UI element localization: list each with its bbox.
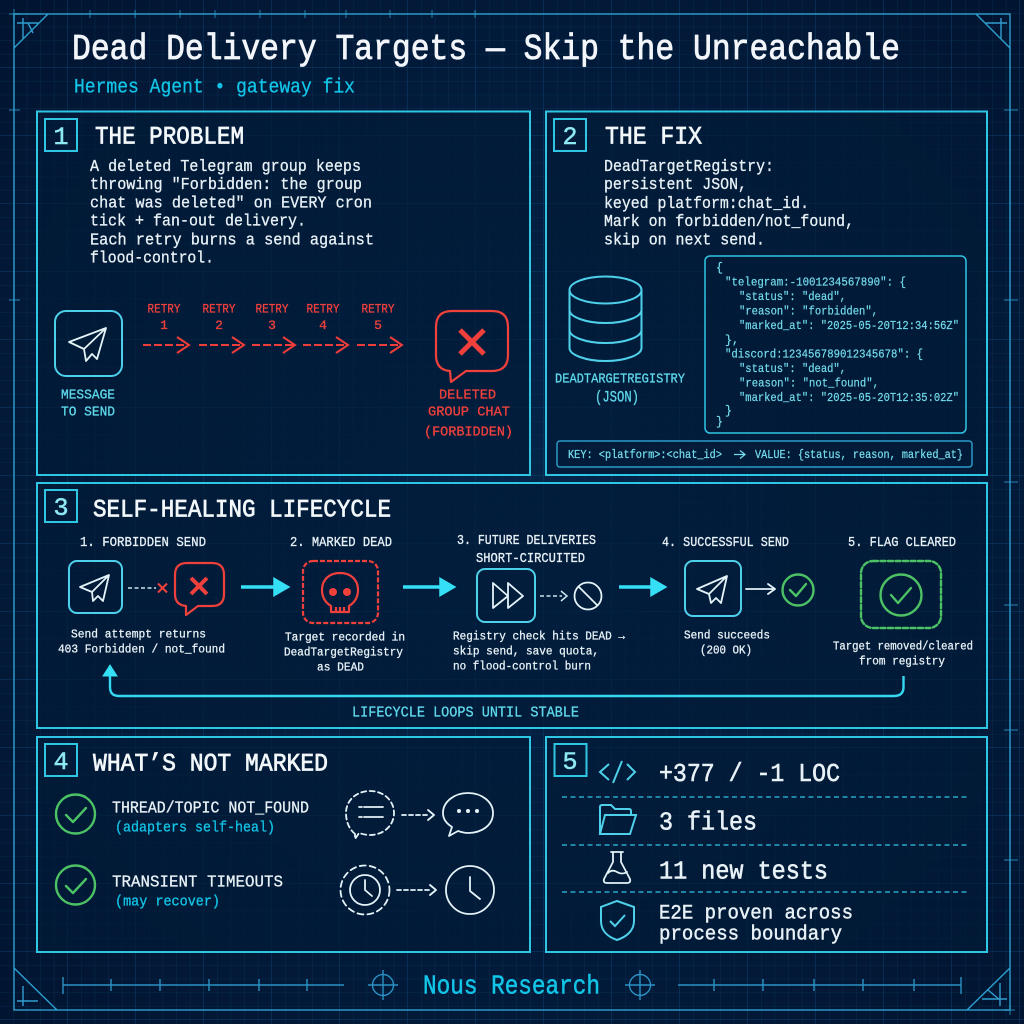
label: message to send: TO SEND bbox=[61, 404, 115, 420]
fix description bbox=[604, 157, 854, 250]
JSON code box: } bbox=[716, 416, 723, 429]
label: database: DEADTARGETREGISTRY bbox=[555, 372, 686, 388]
JSON code box: "status": "dead", bbox=[739, 363, 846, 376]
item: thread/topic not found bbox=[56, 794, 309, 836]
fix description: DeadTargetRegistry: bbox=[604, 157, 774, 176]
step 1: forbidden send: 1. FORBIDDEN SEND bbox=[80, 535, 206, 551]
step 5: flag cleared bbox=[833, 535, 973, 668]
JSON code box: "marked_at": "2025-05-20T12:34:56Z" bbox=[739, 320, 959, 333]
number badge 4: 4 bbox=[53, 748, 69, 777]
step 1: forbidden send bbox=[58, 535, 225, 656]
problem description: Each retry burns a send against bbox=[90, 230, 374, 250]
JSON code box bbox=[705, 256, 966, 433]
number badge 2 bbox=[554, 119, 586, 152]
panel 4: what's not marked bbox=[37, 737, 530, 952]
stat: tests: 11 new tests bbox=[659, 858, 828, 886]
label: deleted group chat: GROUP CHAT bbox=[428, 404, 510, 420]
panel 2: the fix bbox=[546, 112, 987, 475]
label: deleted group chat bbox=[424, 388, 513, 440]
JSON code box: "telegram:-1001234567890": { bbox=[725, 276, 906, 290]
retry arrows bbox=[143, 337, 402, 353]
retry labels: RETRY bbox=[306, 302, 340, 316]
label: deleted group chat: DELETED bbox=[439, 388, 496, 404]
number badge 1: 1 bbox=[53, 123, 69, 152]
step 1: forbidden send: Send attempt returns bbox=[71, 628, 206, 642]
problem description bbox=[90, 157, 374, 268]
retry labels: RETRY bbox=[202, 302, 236, 316]
retry labels: 2 bbox=[215, 318, 223, 333]
arrow: step 1 to 2 bbox=[241, 580, 287, 594]
JSON code box: "discord:123456789012345678": { bbox=[725, 348, 923, 362]
JSON code box: "reason": "forbidden", bbox=[739, 306, 878, 318]
item: transient timeouts bbox=[56, 866, 283, 910]
label: message to send: MESSAGE bbox=[61, 388, 115, 404]
JSON code box: "reason": "not_found", bbox=[739, 378, 879, 390]
step 5: flag cleared: 5. FLAG CLEARED bbox=[848, 535, 956, 551]
subtitle: Hermes Agent • gateway fix bbox=[74, 76, 355, 100]
title: Dead Delivery Targets — Skip the Unreachable bbox=[72, 29, 900, 70]
fix description: Mark on forbidden/not_found, bbox=[604, 212, 854, 231]
label: database: (JSON) bbox=[595, 388, 639, 406]
item: transient timeouts: TRANSIENT TIMEOUTS bbox=[112, 872, 283, 892]
step 4: successful send: (200 OK) bbox=[700, 644, 752, 658]
stat: tests bbox=[604, 852, 828, 886]
fix description: persistent JSON, bbox=[604, 175, 747, 194]
label: database bbox=[555, 372, 686, 406]
heading: lifecycle: SELF-HEALING LIFECYCLE bbox=[93, 496, 391, 524]
panel 3: self-healing lifecycle bbox=[37, 483, 987, 728]
panel 5: stats bbox=[546, 737, 987, 952]
step 2: marked dead bbox=[284, 535, 405, 674]
stat: files bbox=[600, 805, 757, 838]
icon: database bbox=[570, 276, 642, 361]
arrow: step 2 to 3 bbox=[403, 580, 453, 594]
heading: the fix: THE FIX bbox=[605, 122, 702, 152]
retry labels: 4 bbox=[319, 318, 327, 333]
stat: e2e: E2E proven across bbox=[659, 902, 853, 926]
step 5: flag cleared: from registry bbox=[859, 654, 945, 668]
step 2: marked dead: Target recorded in bbox=[285, 630, 405, 644]
step 1: forbidden send: 403 Forbidden / not_found bbox=[58, 642, 225, 656]
key value legend: KEY: <platform>:<chat_id> bbox=[568, 449, 722, 462]
key value legend: VALUE: {status, reason, marked_at} bbox=[755, 449, 963, 462]
step 4: successful send: Send succeeds bbox=[684, 628, 770, 642]
loop arrow bbox=[103, 665, 904, 696]
retry labels: RETRY bbox=[256, 302, 289, 316]
problem description: A deleted Telegram group keeps bbox=[90, 157, 361, 176]
arrow: step 3 to 4 bbox=[619, 580, 664, 594]
fix description: skip on next send. bbox=[604, 230, 765, 250]
problem description: throwing "Forbidden: the group bbox=[90, 175, 362, 194]
icon: deleted group chat bbox=[436, 311, 508, 382]
problem description: flood-control. bbox=[90, 248, 214, 268]
stat: files: 3 files bbox=[659, 808, 757, 838]
stat: lines of code: +377 / -1 LOC bbox=[659, 760, 840, 789]
JSON code box: { bbox=[716, 262, 723, 275]
number badge 1 bbox=[45, 119, 77, 152]
JSON code box: } bbox=[725, 405, 732, 418]
number badge 5: 5 bbox=[562, 748, 578, 777]
retry labels bbox=[148, 302, 395, 333]
stat: e2e: process boundary bbox=[659, 924, 842, 946]
item: transient timeouts: (may recover) bbox=[115, 894, 220, 910]
step 2: marked dead: DeadTargetRegistry bbox=[284, 646, 403, 660]
step 3: future deliveries short-circuited: no flood-control burn bbox=[453, 660, 591, 674]
problem description: tick + fan-out delivery. bbox=[90, 212, 306, 230]
label: deleted group chat: (FORBIDDEN) bbox=[424, 424, 513, 440]
step 5: flag cleared: Target removed/cleared bbox=[833, 640, 973, 654]
icon: dashed clock to clock bbox=[340, 866, 494, 914]
heading: not marked: WHAT’S NOT MARKED bbox=[93, 750, 328, 778]
number badge 3: 3 bbox=[53, 494, 69, 523]
retry labels: 1 bbox=[160, 318, 168, 333]
step 2: marked dead: 2. MARKED DEAD bbox=[290, 535, 392, 551]
JSON code box: "status": "dead", bbox=[739, 291, 846, 304]
step 2: marked dead: as DEAD bbox=[317, 660, 364, 674]
label: message to send bbox=[61, 388, 115, 420]
step 3: future deliveries short-circuited: Registry check hits DEAD → bbox=[453, 630, 626, 644]
step 4: successful send: 4. SUCCESSFUL SEND bbox=[662, 535, 789, 551]
step 4: successful send bbox=[662, 535, 814, 658]
loop caption: LIFECYCLE LOOPS UNTIL STABLE bbox=[352, 706, 579, 722]
item: thread/topic not found: THREAD/TOPIC NOT_FOUND bbox=[112, 798, 309, 818]
footer: rulers and crosshairs bbox=[63, 970, 961, 1000]
item: thread/topic not found: (adapters self-heal) bbox=[115, 820, 275, 836]
problem description: chat was deleted" on EVERY cron bbox=[90, 194, 372, 212]
number badge 3 bbox=[45, 490, 77, 523]
number badge 4 bbox=[45, 744, 77, 777]
footer: brand: Nous Research bbox=[423, 972, 600, 1002]
step 3: future deliveries short-circuited: SHORT-CIRCUITED bbox=[476, 551, 585, 567]
icon: message to send bbox=[55, 311, 122, 376]
fix description: keyed platform:chat_id. bbox=[604, 194, 809, 213]
JSON code box: }, bbox=[725, 334, 739, 348]
heading: the problem: THE PROBLEM bbox=[95, 122, 244, 152]
panel 1: the problem bbox=[37, 112, 530, 475]
JSON code box: "marked_at": "2025-05-20T12:35:02Z" bbox=[739, 392, 959, 405]
number badge 2: 2 bbox=[562, 123, 578, 152]
step 3: future deliveries short-circuited: 3. FUTURE DELIVERIES bbox=[457, 533, 596, 549]
stat: e2e bbox=[601, 901, 853, 946]
icon: dashed thread to chat bubble bbox=[346, 791, 493, 839]
retry labels: 5 bbox=[374, 318, 382, 333]
key value legend bbox=[557, 441, 972, 467]
step 3: future deliveries short-circuited bbox=[453, 533, 626, 674]
retry labels: RETRY bbox=[148, 302, 181, 316]
step 3: future deliveries short-circuited: skip send, save quota, bbox=[453, 644, 599, 658]
retry labels: RETRY bbox=[362, 302, 395, 316]
retry labels: 3 bbox=[268, 318, 276, 333]
number badge 5 bbox=[554, 744, 586, 777]
